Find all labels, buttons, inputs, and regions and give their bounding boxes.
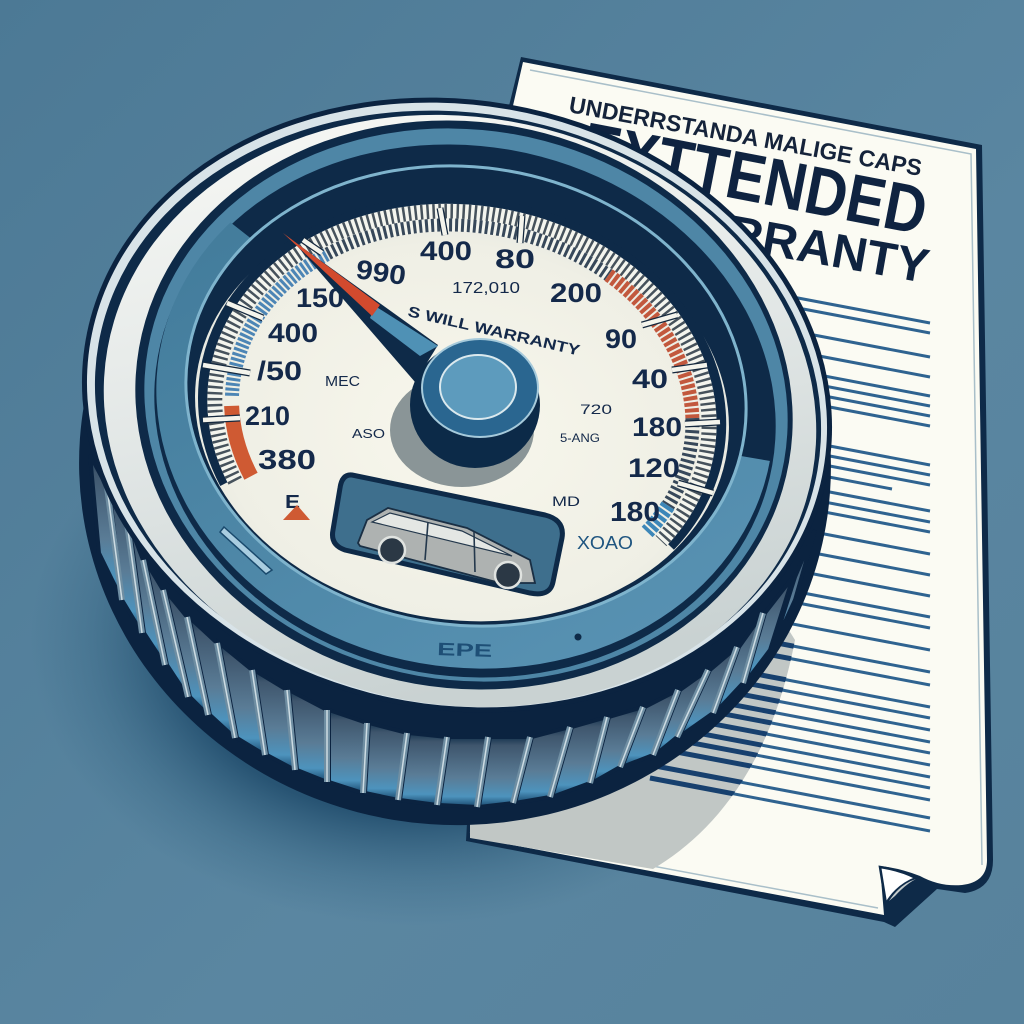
dial numbers: 990 xyxy=(354,254,408,291)
panel: warranty document xyxy=(466,57,993,927)
knurled ridge ring xyxy=(90,455,815,807)
chrome bezel xyxy=(56,59,864,763)
dial numbers: 5-ANG xyxy=(560,431,600,445)
shaded document lines xyxy=(650,642,794,796)
icon: fuel marker xyxy=(283,505,310,520)
dial numbers xyxy=(245,236,682,661)
dial numbers: /50 xyxy=(257,356,302,386)
blue inner band xyxy=(156,222,770,669)
rib separators xyxy=(107,487,763,807)
paper dark edge xyxy=(466,57,993,927)
outer bezel edge xyxy=(33,39,881,771)
hub cast shadow xyxy=(390,373,534,487)
dial numbers: S WILL WARRANTY xyxy=(406,303,581,359)
dial numbers: 210 xyxy=(245,401,290,431)
dial numbers: 720 xyxy=(580,401,612,417)
shaded region of paper xyxy=(470,600,795,869)
dial numbers: 400 xyxy=(268,318,318,348)
document body text lines xyxy=(650,270,930,831)
rib highlights xyxy=(107,487,763,807)
dial numbers: XOAO xyxy=(577,533,633,553)
scale bands and ticks xyxy=(190,168,749,551)
document heading: warranty: WARRANTY xyxy=(646,193,933,294)
dial numbers: 80 xyxy=(495,244,535,274)
dial numbers: MEC xyxy=(325,373,360,390)
dial numbers: 200 xyxy=(550,278,602,308)
dark dial surround with light rim xyxy=(156,130,776,662)
dark band xyxy=(112,96,818,726)
textured blue ring xyxy=(100,78,832,732)
needle hub xyxy=(410,339,540,468)
gauge body silhouette xyxy=(55,80,855,850)
dial numbers: E xyxy=(285,492,300,512)
paper sheet xyxy=(470,62,987,915)
dial numbers: 90 xyxy=(605,324,637,354)
panel: speedometer gauge xyxy=(79,98,832,826)
outer silver ring xyxy=(39,45,875,765)
odometer window with car xyxy=(332,475,562,594)
bezel slot detail xyxy=(220,527,272,574)
dial numbers: MD xyxy=(552,493,580,509)
gauge dial face xyxy=(168,169,756,655)
document heading: extended: EXTTENDED xyxy=(575,108,933,250)
dial numbers: 150 xyxy=(296,283,344,313)
dial numbers: 380 xyxy=(258,444,316,475)
chrome inner dark line xyxy=(90,69,838,741)
dial numbers: 180 xyxy=(610,496,660,527)
dial numbers: 180 xyxy=(632,412,682,442)
drop shadow on table xyxy=(30,355,800,925)
folded corner xyxy=(880,867,916,904)
paper inner border line xyxy=(470,70,982,908)
dial numbers: 400 xyxy=(420,236,472,266)
document heading small: UNDERRSTANDA MALIGE CAPS xyxy=(567,91,924,181)
dial numbers: 172,010 xyxy=(452,280,520,297)
bezel rivet xyxy=(574,634,582,640)
dial numbers: 120 xyxy=(628,453,680,483)
icon: car xyxy=(358,508,535,588)
dial numbers: 40 xyxy=(632,364,668,394)
dial numbers: EPE xyxy=(437,639,493,661)
gauge needle xyxy=(283,233,438,382)
dial numbers: ASO xyxy=(352,426,385,441)
bezel dark line xyxy=(47,54,869,760)
